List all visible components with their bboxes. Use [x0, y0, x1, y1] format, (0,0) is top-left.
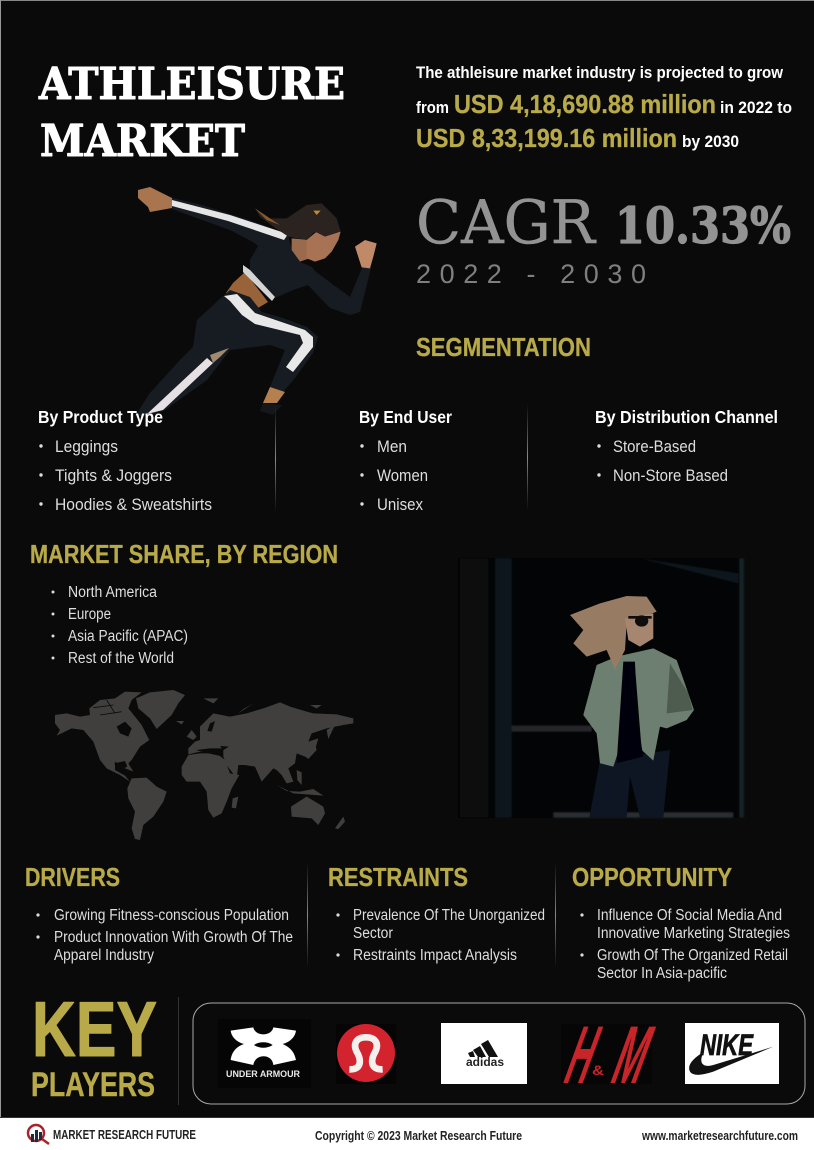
panel: key player logos	[193, 1003, 805, 1104]
panel: by product type: Hoodies & Sweatshirts	[55, 496, 212, 514]
panel: opportunity	[572, 862, 790, 982]
panel: drivers: Product Innovation With Growth Of The	[54, 929, 293, 946]
logo: adidas	[441, 1023, 527, 1084]
panel: restraints: RESTRAINTS	[328, 862, 468, 892]
title: MARKET	[40, 116, 245, 167]
panel: by distribution channel: Store-Based	[613, 438, 696, 456]
panel: opportunity: Innovative Marketing Strategies	[597, 925, 790, 942]
list: regions: Asia Pacific (APAC)	[68, 628, 188, 645]
panel: drivers: DRIVERS	[25, 862, 120, 892]
panel: drivers: Growing Fitness-conscious Population	[54, 907, 289, 924]
CAGR	[416, 188, 791, 258]
panel: drivers: Apparel Industry	[54, 947, 154, 964]
logo: under armour	[218, 1019, 311, 1088]
CAGR: 10.33%	[615, 196, 791, 255]
panel: by end user	[359, 407, 452, 514]
panel: by end user: Unisex	[377, 496, 424, 514]
panel: by distribution channel	[595, 407, 778, 485]
panel: by end user: Men	[377, 438, 407, 456]
list: regions: Rest of the World	[68, 650, 174, 667]
panel: by product type: Leggings	[55, 438, 118, 456]
market projection text: USD 4,18,690.88 million	[454, 89, 716, 119]
market projection text: from	[416, 98, 449, 117]
list: regions	[52, 584, 188, 667]
logo: adidas: adidas	[466, 1055, 504, 1069]
logo: h&m: H	[555, 1008, 612, 1100]
heading: market share: MARKET SHARE, BY REGION	[30, 539, 338, 569]
panel: by product type: By Product Type	[38, 407, 163, 427]
logo: under armour: UNDER ARMOUR	[226, 1069, 300, 1079]
panel: restraints: Prevalence Of The Unorganized	[353, 907, 545, 924]
panel: by end user: Women	[377, 467, 428, 485]
panel: restraints: Sector	[353, 925, 393, 942]
world map	[55, 690, 353, 840]
market projection text: USD 8,33,199.16 million	[416, 123, 677, 153]
footer band: MARKET RESEARCH FUTURE	[53, 1127, 196, 1142]
list: regions: North America	[68, 584, 157, 601]
CAGR period: 2022 - 2030	[416, 259, 646, 289]
logo: nike	[685, 1023, 779, 1084]
list: regions: Europe	[68, 606, 111, 623]
panel: by distribution channel: By Distribution Channel	[595, 407, 778, 427]
panel: by end user: By End User	[359, 407, 452, 427]
heading: key players: KEY	[32, 985, 157, 1073]
heading: key players: PLAYERS	[31, 1066, 155, 1104]
illustration: sprinting athlete	[135, 187, 377, 416]
heading: key players	[31, 985, 157, 1104]
footer band	[0, 1117, 814, 1150]
title	[38, 59, 345, 167]
panel: by product type	[38, 407, 212, 514]
title: ATHLEISURE	[38, 59, 345, 110]
logo: nike: NIKE	[700, 1029, 754, 1062]
logo: h&m: M	[602, 1008, 665, 1100]
panel: opportunity: OPPORTUNITY	[572, 862, 732, 892]
logo: lululemon	[336, 1024, 396, 1084]
panel: by distribution channel: Non-Store Based	[613, 467, 728, 485]
photo: woman in green bomber jacket	[458, 558, 744, 818]
copyright: Copyright © 2023 Market Research Future	[315, 1128, 522, 1143]
panel: by product type: Tights & Joggers	[55, 467, 172, 485]
panel: opportunity: Influence Of Social Media And	[597, 907, 782, 924]
CAGR: CAGR	[416, 188, 597, 258]
panel: opportunity: Growth Of The Organized Retail	[597, 947, 788, 964]
panel: restraints: Restraints Impact Analysis	[353, 947, 517, 964]
logo: market research future	[28, 1125, 49, 1144]
logo: h&m: &	[592, 1062, 604, 1078]
panel: restraints	[328, 862, 545, 964]
market projection text	[416, 63, 792, 153]
market projection text: by 2030	[682, 132, 739, 151]
panel: drivers	[25, 862, 293, 964]
heading: segmentation: SEGMENTATION	[416, 332, 591, 362]
panel: opportunity: Sector In Asia-pacific	[597, 965, 727, 982]
market projection text: in 2022 to	[720, 98, 792, 117]
